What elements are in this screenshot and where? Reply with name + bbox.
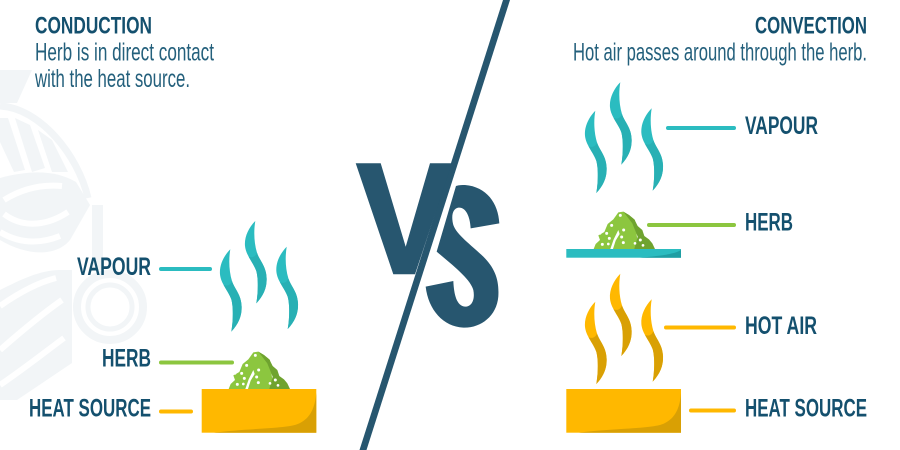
label: herb: HERB — [745, 209, 793, 237]
label: herb: HERB — [102, 345, 151, 373]
label: vapour: VAPOUR — [745, 112, 818, 140]
label: hot air: HOT AIR — [745, 312, 817, 340]
leader line: herb — [161, 360, 232, 364]
panel: conduction heading — [34, 12, 214, 93]
leader line: herb — [649, 223, 734, 227]
leader line: heat source — [161, 410, 191, 414]
label: heat source: HEAT SOURCE — [29, 395, 151, 423]
icon: heat source block — [202, 389, 316, 433]
icon: vapour waves — [220, 221, 298, 332]
icon: plate — [566, 249, 681, 258]
label: vapour: VAPOUR — [77, 253, 151, 281]
text: conduction description: with the heat source. — [34, 65, 190, 93]
panel: convection diagram — [566, 82, 867, 433]
icon: hot air waves — [585, 274, 663, 384]
leader line: heat source — [691, 408, 734, 412]
VS emblem — [356, 163, 499, 328]
text: conduction description — [34, 39, 214, 93]
panel: convection heading — [573, 12, 867, 66]
text: conduction description: Herb is in direct contact — [35, 39, 214, 67]
panel: conduction diagram — [29, 221, 316, 433]
diagonal divider — [360, 0, 510, 450]
background watermark: helmeted figure — [0, 70, 143, 400]
title: conduction: CONDUCTION — [35, 12, 152, 39]
icon: vapour waves — [585, 82, 663, 193]
icon: heat source block — [566, 389, 681, 433]
icon: herb pile — [229, 352, 290, 389]
leader line: vapour — [161, 267, 210, 271]
leader line: vapour — [668, 126, 734, 130]
leader line: hot air — [666, 326, 734, 330]
icon: herb pile — [594, 212, 655, 249]
